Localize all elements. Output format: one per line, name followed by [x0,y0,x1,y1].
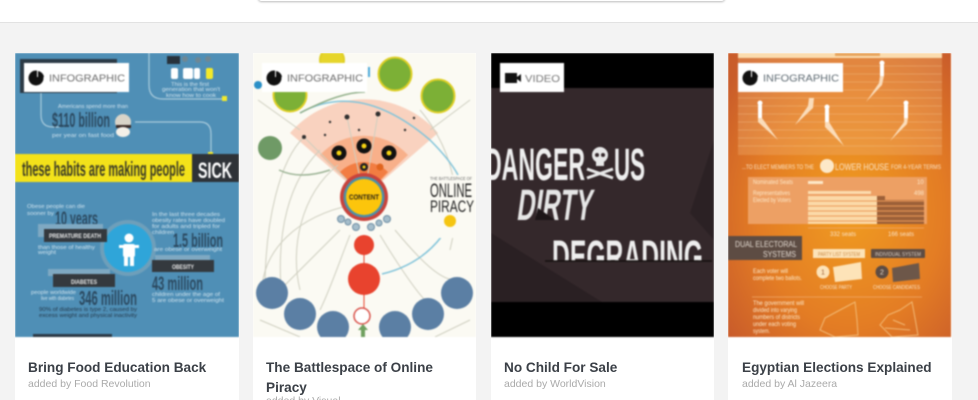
stat block: obesity: 5 are obese or overweight [152,298,225,304]
title: Bring Food Education Back [28,360,206,375]
title: online piracy [428,175,474,238]
small satellite rings [338,216,390,230]
seat labels: 332 seats [830,232,856,238]
seat labels: 166 seats [888,232,914,238]
badge: video [500,63,564,92]
voter text [753,268,802,282]
text: top right caption: generation that won't [162,87,221,93]
video thumbnail [491,53,714,338]
infographic thumbnail: elections [728,53,952,338]
stat: 110 billion [52,104,128,139]
stat: 110 billion: $110 billion [52,110,110,132]
seats table chart: Representatives [753,191,790,197]
stat block: 1.5 billion: are obese or overweight [154,247,223,253]
headline: dirty [515,181,596,230]
icon: skull and crossbones [587,147,613,178]
blue circles [256,277,473,343]
individual system [871,249,925,291]
individual system: 2 [880,270,884,276]
stat block: 1.5 billion [152,212,225,253]
stat block: premature death: weight [37,250,57,256]
badge: infographic [24,63,129,92]
stat block: premature death: sooner by [27,211,54,217]
stat: 110 billion: Americans spend more than [58,104,128,110]
stat block: 1.5 billion: obesity rates have doubled [152,218,225,224]
stat block: 1.5 billion: children [152,230,174,236]
voter text: Each voter will [753,268,788,275]
icon: burger [115,114,131,137]
badge: infographic [738,63,843,92]
stat block: 1.5 billion: for adults and tripled for [152,224,220,230]
top strip [738,53,942,58]
stat block: obesity: 43 million [152,274,203,295]
box: dual electoral systems: SYSTEMS [763,250,796,259]
card: No Child For Sale [491,53,714,400]
content circle [340,173,388,221]
seats table chart: 498 [914,191,925,197]
box: dual electoral systems [728,236,802,260]
small nodes [302,112,415,139]
card: The Battlespace of Online Piracy [253,53,476,400]
black and yellow nodes [332,138,396,171]
districts text: divided into varying [753,307,797,314]
text: top right caption [162,82,221,99]
card: Egyptian Elections Explained [728,53,952,400]
figures [758,60,908,146]
stat block: obesity [152,255,225,304]
maps [820,302,918,337]
heading: lower house: LOWER HOUSE [835,162,889,173]
badge: infographic: INFOGRAPHIC [287,72,363,84]
districts text: under each voting [753,321,796,328]
search box [258,0,725,1]
text: top right caption: know how to cook [166,93,217,99]
text: top right caption: This is the first [171,82,210,88]
seats table chart: Nominated Seats [753,180,793,186]
stat block: premature death: Obese people can die [27,204,85,210]
stat block: diabetes: DIABETES [71,279,98,286]
card: Bring Food Education Back [15,53,239,400]
party list system: PARTY LIST SYSTEM [818,252,860,258]
title: No Child For Sale [504,360,617,375]
seats table chart: 10 [917,180,924,186]
heading: lower house: ...TO ELECT MEMBERS TO THE [742,164,814,171]
stat block: diabetes: 346 million [79,288,137,310]
icon: people [187,68,212,79]
party list system [813,249,865,291]
stat block: premature death: PREMATURE DEATH [49,233,101,240]
title: Egyptian Elections Explained [742,360,932,375]
title [266,360,433,395]
central figure icon [100,220,156,276]
heading: lower house: FOR 4-YEAR TERMS [891,165,941,171]
stat block: premature death [27,204,107,256]
title: Piracy [266,380,307,395]
stat block: diabetes: 90% of diabetes is type 2, caused by [39,307,137,313]
added by: added by Food Revolution [28,378,151,390]
districts text: numbers of districts [753,314,801,321]
stat block: diabetes: people worldwide [31,290,76,296]
voter text: complete two ballots. [753,275,802,282]
individual system: INDIVIDUAL SYSTEM [875,252,921,258]
heading: lower house [742,159,941,173]
top navigation bar [0,0,978,23]
stat block: premature death: 10 years [55,209,98,230]
badge: video: VIDEO [525,73,560,85]
stat block: 1.5 billion: In the last three decades [152,212,220,218]
individual system: CHOOSE CANDIDATES [873,285,921,291]
wedge diagram [290,99,438,197]
party list system: 1 [821,270,825,276]
video thumbnail: US [614,139,645,190]
districts text: The government will [753,300,804,307]
added by: added by Al Jazeera [742,378,837,390]
added by: added by WorldVision [504,378,606,390]
badge: infographic: INFOGRAPHIC [763,72,839,84]
stat block: obesity: OBESITY [172,264,195,271]
seat labels [808,228,924,238]
red circles [348,235,380,337]
box: dual electoral systems: DUAL ELECTORAL [735,240,797,249]
stat block: diabetes: excess weight and physical inactivity [39,313,137,319]
stat: 110 billion: per year on fast food [52,133,114,139]
stat block: obesity: children under the age of [152,292,221,298]
districts text [753,300,804,335]
infographic thumbnail: food habits [15,53,239,338]
infographic thumbnail: online piracy [253,53,476,338]
badge: infographic [262,63,367,92]
stat block: diabetes: live with diabetes [41,296,74,302]
seats table chart: Elected by Voters [753,198,791,204]
districts text: system. [753,328,770,335]
headline: dirty: DIRTY [515,181,596,230]
badge: infographic: INFOGRAPHIC [49,72,125,84]
party list system: CHOOSE PARTY [820,285,853,291]
content circle: CONTENT [349,194,380,202]
title: The Battlespace of Online [266,360,433,375]
stat block: premature death: than those of healthy [38,245,95,251]
green circles [274,48,454,112]
stat block: diabetes [31,269,137,319]
seats table chart [748,177,927,224]
connecting arcs [258,100,470,337]
